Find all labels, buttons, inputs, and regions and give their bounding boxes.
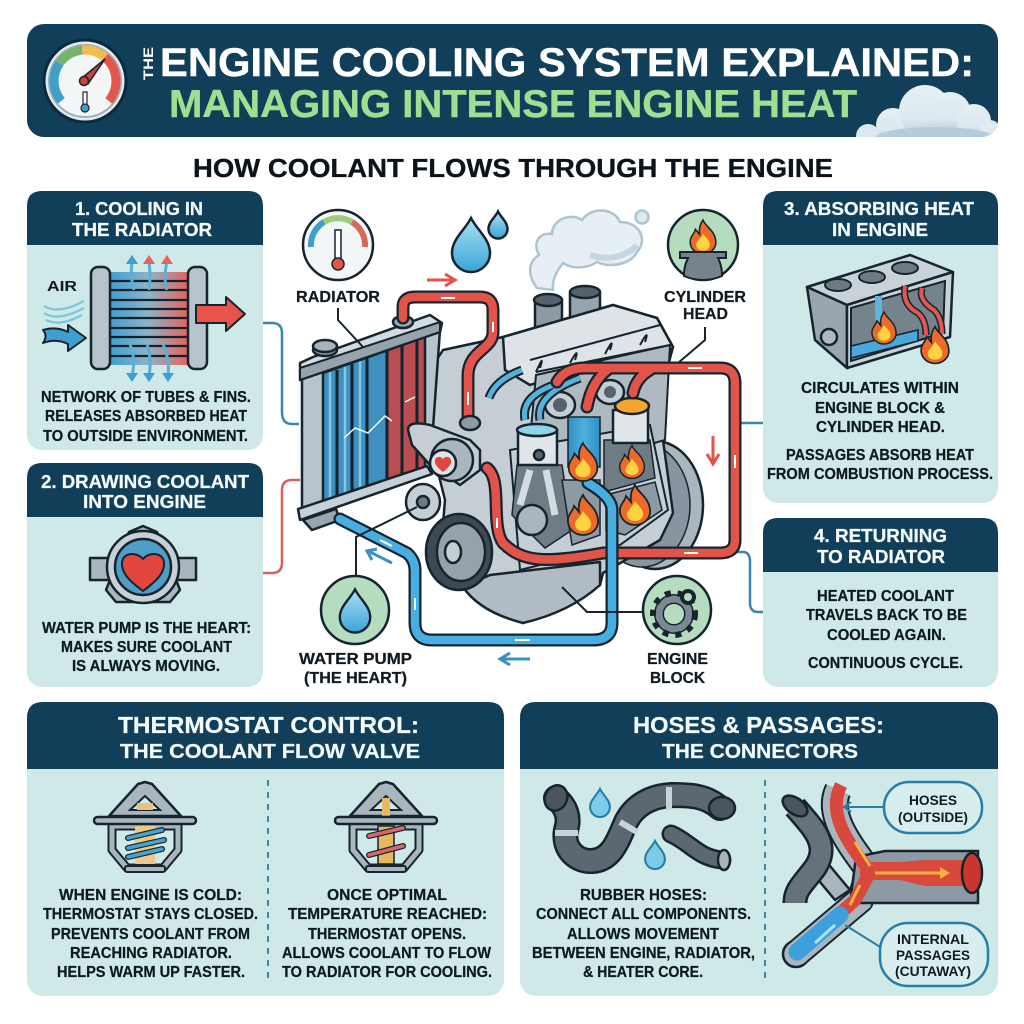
hose flow markers (380, 298, 735, 640)
exhaust stacks (534, 286, 600, 335)
heading (633, 712, 884, 763)
radiator (298, 315, 442, 530)
callout: internal passages (880, 923, 988, 986)
heading: 4. RETURNING (814, 526, 947, 546)
callout: hoses outside: (OUTSIDE) (898, 809, 968, 825)
flames (568, 443, 650, 535)
connector: panel 2 to radiator (263, 480, 300, 573)
red return loop (487, 368, 735, 560)
engine flywheel (607, 441, 703, 569)
callout arrow: internal passages (845, 925, 885, 950)
label: cylinder head: HEAD (683, 306, 728, 323)
description: WATER PUMP IS THE HEART: (42, 620, 251, 637)
text: rubber hoses: RUBBER HOSES: (580, 887, 707, 904)
text: optimal temperature: ONCE OPTIMAL (327, 887, 447, 904)
icon: water drops (452, 212, 508, 272)
text: rubber hoses: CONNECT ALL COMPONENTS. (536, 906, 751, 923)
callout: hoses outside: HOSES (909, 792, 957, 808)
icon: thermostat open (335, 782, 437, 872)
panel: thermostat control (27, 702, 504, 996)
description: CONTINUOUS CYCLE. (808, 655, 963, 672)
text: engine cold: THERMOSTAT STAYS CLOSED. (43, 906, 258, 923)
leader: radiator (338, 308, 363, 347)
engine block frame (510, 425, 668, 570)
label: cylinder head (664, 289, 746, 323)
description: MAKES SURE COOLANT (61, 639, 232, 656)
piston right (613, 398, 649, 443)
title banner (27, 24, 1000, 149)
piston left (517, 424, 557, 535)
icon: water pump drop (321, 576, 389, 644)
panel: step 4 returning to radiator (763, 518, 998, 687)
label: water pump: (THE HEART) (304, 670, 407, 687)
icon: rubber hoses (541, 782, 735, 870)
arrow: blue diagonal (367, 549, 392, 563)
connector: panel 1 to radiator (263, 323, 299, 424)
section heading: HOW COOLANT FLOWS THROUGH THE ENGINE (193, 153, 833, 183)
description: CIRCULATES WITHIN (801, 380, 959, 397)
description: NETWORK OF TUBES & FINS. (41, 389, 251, 406)
arrow: blue left (500, 653, 530, 665)
text: rubber hoses: BETWEEN ENGINE, RADIATOR, (532, 945, 755, 962)
label: water pump (299, 651, 412, 687)
label: radiator: RADIATOR (296, 289, 380, 306)
connector: panel 3 to engine (737, 422, 763, 424)
description: CYLINDER HEAD. (816, 419, 945, 436)
blue return hose (340, 483, 612, 640)
manifold ports (545, 380, 624, 418)
text: rubber hoses (532, 887, 755, 981)
label: engine block (647, 651, 708, 687)
heading: IN ENGINE (832, 220, 928, 240)
heading: 1. COOLING IN (75, 199, 203, 219)
heading: 3. ABSORBING HEAT (784, 199, 974, 219)
icon: engine block cutaway (807, 255, 953, 368)
icon: cloud (856, 85, 998, 137)
head ribs (536, 335, 647, 372)
description: TRAVELS BACK TO BE (806, 607, 967, 624)
heading (72, 199, 212, 240)
icon: cylinder head (668, 210, 738, 280)
arrow: red right (427, 274, 455, 286)
text: optimal temperature: THERMOSTAT OPENS. (308, 926, 466, 943)
heading: THE CONNECTORS (662, 741, 858, 763)
text: engine cold: HELPS WARM UP FASTER. (57, 964, 245, 981)
icon: water pump heart (90, 526, 196, 603)
description: HEATED COOLANT (817, 588, 954, 605)
arrow: red down (707, 436, 719, 464)
text: engine cold (43, 887, 258, 981)
callout arrow: hoses (844, 802, 884, 812)
text: optimal temperature: TO RADIATOR FOR COOLING. (282, 964, 492, 981)
callout: internal passages: PASSAGES (896, 947, 970, 963)
description: COOLED AGAIN. (827, 627, 946, 644)
label: engine block: BLOCK (650, 670, 705, 687)
text: optimal temperature: ALLOWS COOLANT TO FLOW (282, 945, 492, 962)
heading (814, 526, 947, 567)
icon: thermostat closed (94, 782, 196, 872)
icon: engine block gears (643, 576, 711, 644)
description (42, 620, 251, 675)
pulleys (406, 484, 492, 590)
text: engine cold: WHEN ENGINE IS COLD: (59, 887, 242, 904)
heading (118, 712, 420, 763)
engine body (430, 305, 673, 623)
small vertical word: THE (140, 47, 156, 80)
cylinder head frame (530, 345, 670, 470)
text: engine cold: PREVENTS COOLANT FROM (51, 926, 250, 943)
icon: temperature gauge (44, 40, 126, 122)
heading: TO RADIATOR (817, 547, 945, 567)
description: TO OUTSIDE ENVIRONMENT. (43, 428, 248, 445)
description: ENGINE BLOCK & (815, 400, 945, 417)
label: cylinder head: CYLINDER (664, 289, 746, 306)
blue upper hoses (489, 370, 580, 420)
callout: hoses outside (884, 782, 982, 833)
engine flywheel inner (594, 443, 690, 567)
text: optimal temperature (282, 887, 492, 981)
panel: hoses and passages (520, 702, 998, 996)
heading: THE COOLANT FLOW VALVE (120, 741, 420, 763)
description (806, 588, 967, 672)
leader: cylinder head (678, 327, 705, 363)
title line 1: ENGINE COOLING SYSTEM EXPLAINED: (160, 41, 974, 85)
label: water pump: WATER PUMP (299, 651, 412, 668)
water pump (408, 416, 480, 485)
icon: radiator with air flow (43, 255, 245, 382)
text: rubber hoses: ALLOWS MOVEMENT (567, 926, 719, 943)
red upper hose (403, 297, 493, 422)
callout: internal passages: (CUTAWAY) (895, 963, 971, 979)
heading: INTO ENGINE (83, 492, 206, 512)
oil pan (463, 562, 600, 623)
description (767, 380, 993, 483)
title line 2: MANAGING INTENSE ENGINE HEAT (169, 83, 857, 126)
icon: hose cutaway (779, 785, 982, 967)
icon: steam cloud (530, 210, 648, 290)
heading (784, 199, 974, 240)
engine diagram (296, 210, 746, 687)
description: PASSAGES ABSORB HEAT (786, 447, 974, 464)
connector: panel 4 to engine (737, 552, 763, 612)
text: optimal temperature: TEMPERATURE REACHED: (288, 906, 487, 923)
heading: HOSES & PASSAGES: (633, 712, 884, 738)
panel: step 1 cooling in the radiator (27, 191, 263, 450)
description: FROM COMBUSTION PROCESS. (767, 466, 993, 483)
heading: THERMOSTAT CONTROL: (118, 712, 419, 738)
label: engine block: ENGINE (647, 651, 708, 668)
heading: 2. DRAWING COOLANT (41, 472, 249, 492)
description: RELEASES ABSORBED HEAT (45, 408, 247, 425)
heading: THE RADIATOR (72, 220, 212, 240)
cutaway recesses (512, 440, 662, 548)
text: rubber hoses: & HEATER CORE. (583, 964, 703, 981)
icon: radiator with air flow: AIR (47, 278, 77, 295)
panel: step 2 drawing coolant into engine (27, 463, 263, 687)
leader: water pump (356, 507, 417, 575)
valve cover (503, 305, 673, 385)
heading (41, 472, 249, 512)
text: engine cold: REACHING RADIATOR. (70, 945, 232, 962)
blue cylinder (568, 417, 600, 467)
panel: step 3 absorbing heat in engine (763, 191, 998, 503)
callout: internal passages: INTERNAL (897, 931, 969, 947)
leader: engine block (562, 587, 643, 612)
description (41, 389, 251, 445)
description: IS ALWAYS MOVING. (72, 658, 220, 675)
icon: radiator gauge (303, 210, 373, 280)
